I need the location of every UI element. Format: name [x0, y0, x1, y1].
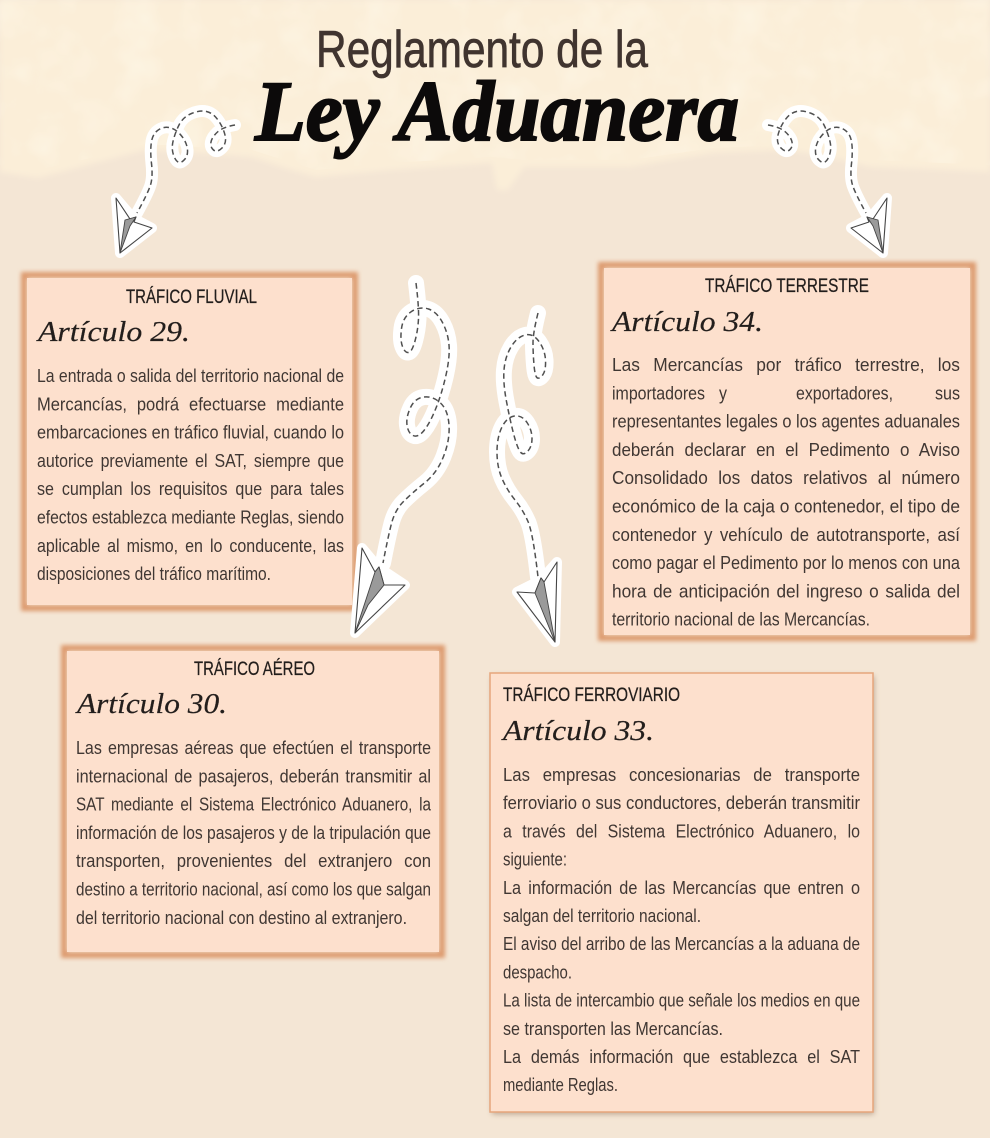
- heading: TRÁFICO TERRESTRE: [705, 276, 869, 297]
- body text: siguiente:: [503, 849, 567, 870]
- body text: [503, 764, 860, 1095]
- body text: y: [719, 382, 728, 403]
- title line 1: Reglamento de la: [316, 21, 648, 79]
- body text: La lista de intercambio que señale los medios en que: [503, 990, 860, 1011]
- body text: El aviso del arribo de las Mercancías a la aduana de: [503, 933, 860, 954]
- body text: territorio nacional de las Mercancías.: [612, 609, 870, 630]
- arrow: top left paper plane: [116, 111, 235, 253]
- body text: económico de la caja o contenedor, el tipo de: [612, 496, 960, 516]
- body text: La información de las Mercancías que entren o: [503, 877, 860, 898]
- article number: Artículo 34.: [610, 307, 763, 338]
- body text: autorice previamente el SAT, siempre que: [37, 450, 344, 471]
- title line 2: Ley Aduanera: [254, 63, 739, 159]
- arrow: top right paper plane: [768, 111, 887, 253]
- body text: disposiciones del tráfico marítimo.: [37, 563, 271, 584]
- body text: ferroviario o sus conductores, deberán transmitir: [503, 792, 860, 813]
- body text: sus: [935, 382, 960, 403]
- body text: del territorio nacional con destino al extranjero.: [76, 907, 407, 928]
- body text: exportadores,: [796, 382, 893, 403]
- body text: aplicable al mismo, en lo conducente, las: [37, 535, 344, 556]
- body text: se transporten las Mercancías.: [503, 1018, 723, 1039]
- body text: [76, 737, 432, 928]
- article number: Artículo 29.: [36, 317, 190, 348]
- body text: a través del Sistema Electrónico Aduanero, lo: [503, 820, 860, 841]
- body text: contenedor y vehículo de autotransporte, así: [612, 524, 961, 545]
- body text: La demás información que establezca el SAT: [503, 1046, 860, 1067]
- body text: SAT mediante el Sistema Electrónico Aduanero, la: [76, 794, 432, 815]
- body text: deberán declarar en el Pedimento o Aviso: [612, 439, 960, 460]
- article number: Artículo 30.: [75, 689, 227, 720]
- body text: embarcaciones en tráfico fluvial, cuando lo: [37, 422, 344, 443]
- panel: tráfico terrestre: [601, 265, 973, 638]
- body text: importadores: [612, 382, 705, 403]
- body text: Consolidado los datos relativos al número: [612, 467, 960, 488]
- panel: tráfico fluvial: [24, 275, 355, 608]
- panel: tráfico aéreo: [64, 648, 442, 955]
- body text: despacho.: [503, 961, 572, 982]
- body text: salgan del territorio nacional.: [503, 905, 701, 926]
- body text: [37, 365, 344, 584]
- body text: mediante Reglas.: [503, 1074, 618, 1095]
- body text: [612, 354, 961, 630]
- title: [254, 21, 739, 159]
- body text: Las empresas concesionarias de transporte: [503, 764, 860, 785]
- body text: La entrada o salida del territorio nacional de: [37, 365, 344, 386]
- article number: Artículo 33.: [501, 716, 654, 747]
- panel: tráfico ferroviario: [490, 673, 874, 1114]
- heading: TRÁFICO FLUVIAL: [126, 287, 257, 308]
- body text: se cumplan los requisitos que para tales: [37, 478, 344, 499]
- body text: transporten, provenientes del extranjero con: [76, 850, 431, 871]
- body text: información de los pasajeros y de la tripulación que: [76, 822, 431, 843]
- body text: Las empresas aéreas que efectúen el transporte: [76, 737, 431, 758]
- heading: TRÁFICO AÉREO: [194, 659, 315, 680]
- body text: hora de anticipación del ingreso o salida del: [612, 580, 960, 601]
- arrow: centre left paper plane: [355, 283, 449, 633]
- body text: efectos establezca mediante Reglas, siendo: [37, 506, 344, 528]
- body text: Mercancías, podrá efectuarse mediante: [37, 393, 344, 414]
- body text: internacional de pasajeros, deberán transmitir al: [76, 765, 431, 786]
- heading: TRÁFICO FERROVIARIO: [503, 685, 680, 706]
- arrow: centre right paper plane: [497, 313, 557, 642]
- body text: destino a territorio nacional, así como los que salgan: [76, 878, 431, 900]
- body text: Las Mercancías por tráfico terrestre, los: [612, 354, 960, 375]
